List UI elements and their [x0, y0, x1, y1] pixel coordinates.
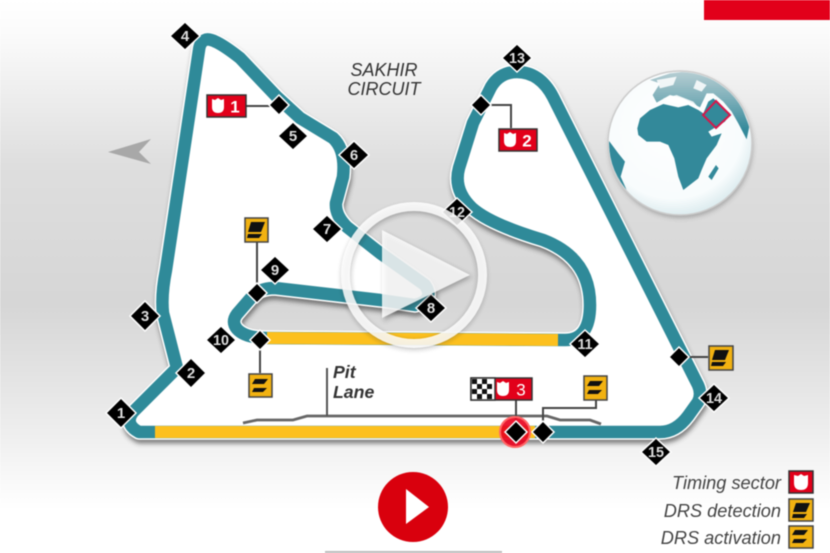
- DRS detection icon top: [245, 218, 268, 242]
- pit lane: Pit: [333, 362, 357, 382]
- connector lines: [246, 105, 708, 432]
- africa and arabia: [637, 98, 730, 190]
- circuit title: [348, 60, 422, 99]
- legend timing icon: [789, 471, 813, 493]
- marker diamonds: [247, 95, 689, 443]
- corner numbers: 9: [271, 262, 279, 279]
- europe and asia: [650, 71, 749, 139]
- corner numbers: 15: [648, 444, 664, 461]
- corner numbers: 11: [578, 336, 592, 353]
- timing sector 3 with chequered flag: [471, 378, 532, 400]
- direction arrow: [108, 139, 151, 164]
- circuit title: SAKHIR: [350, 60, 418, 80]
- legend DRS detection icon: [789, 499, 813, 521]
- corner numbers: 12: [449, 204, 465, 221]
- DRS activation icon bottom: [584, 376, 607, 400]
- pit lane: [243, 362, 601, 424]
- corner numbers: 1: [117, 405, 125, 422]
- corner numbers: 7: [323, 221, 331, 238]
- timing sector 2: [499, 129, 537, 151]
- madagascar: [708, 165, 719, 180]
- DRS zones: [155, 338, 558, 432]
- south america: [608, 140, 627, 190]
- legend: Timing sector: [672, 473, 782, 493]
- red play button: [378, 472, 448, 542]
- legend DRS activation icon: [789, 526, 813, 548]
- video play overlay: [346, 206, 482, 345]
- top red bar: [704, 0, 830, 20]
- corner numbers: 13: [509, 50, 525, 67]
- timing sector 2: 2: [522, 132, 532, 150]
- corner numbers: 2: [187, 365, 195, 382]
- legend: [661, 471, 813, 548]
- legend: DRS activation: [661, 528, 781, 548]
- corner numbers: 4: [181, 28, 190, 45]
- corner numbers: 3: [141, 308, 149, 325]
- timing sector 1: 1: [230, 98, 240, 116]
- globe: [608, 71, 753, 218]
- corner numbers: 8: [427, 300, 435, 317]
- DRS activation icon left: [249, 374, 272, 397]
- timing sector 1: [207, 95, 246, 117]
- pit lane: Lane: [333, 382, 374, 402]
- bottom rule: [325, 551, 502, 553]
- corner numbers: 6: [350, 147, 358, 164]
- region marker: [703, 101, 730, 128]
- corner numbers: 5: [289, 128, 297, 145]
- corner numbers: 14: [706, 390, 723, 407]
- circuit title: CIRCUIT: [348, 79, 422, 99]
- track: [130, 39, 701, 436]
- corner numbers: [106, 22, 729, 466]
- legend: DRS detection: [664, 501, 781, 521]
- DRS detection icon right: [709, 346, 733, 370]
- white europe patches: [657, 77, 707, 107]
- timing sector 3 with chequered flag: 3: [516, 380, 526, 400]
- corner numbers: 10: [213, 332, 229, 349]
- sector 3 finish glow: [500, 417, 530, 447]
